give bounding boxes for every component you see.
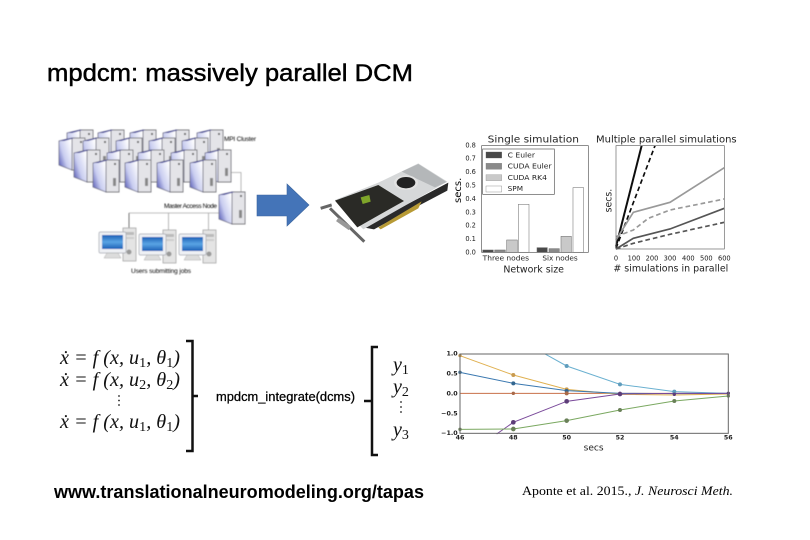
y axis label: secs. xyxy=(453,178,464,203)
outputs y1 y2 y3: y xyxy=(393,354,402,376)
outputs y1 y2 y3: y xyxy=(393,376,402,398)
x tick labels: 600 xyxy=(718,254,731,262)
x tick labels: 48 xyxy=(509,435,518,442)
y tick labels xyxy=(441,351,458,437)
equations: model inputs: 1 xyxy=(166,420,173,435)
chart title: Multiple parallel simulations xyxy=(596,135,737,146)
legend: C Euler xyxy=(508,151,535,159)
chart: time series xyxy=(441,351,733,453)
y tick labels: 0.5 xyxy=(465,181,476,189)
y tick labels: 0.2 xyxy=(465,222,476,230)
axes xyxy=(482,146,588,252)
chart title: Single simulation xyxy=(488,135,579,146)
equations: model inputs: ẋ = f (x, u xyxy=(60,411,138,433)
x tick labels: 46 xyxy=(456,435,465,442)
x tick labels xyxy=(482,254,578,263)
left bracket xyxy=(364,347,378,455)
citation: Aponte et al. 2015., J. Neurosci Meth. xyxy=(522,484,733,498)
axes xyxy=(616,146,724,249)
legend: CUDA RK4 xyxy=(508,174,548,182)
diagram captions: Master Access Node xyxy=(164,203,217,210)
x tick labels: 52 xyxy=(616,435,624,442)
y tick labels: 0.4 xyxy=(465,195,476,203)
lines xyxy=(616,146,724,249)
y tick labels: 1.0 xyxy=(446,351,458,358)
chart: multiple parallel simulations xyxy=(596,135,737,275)
x tick labels: 100 xyxy=(628,254,640,262)
chart: single simulation bars xyxy=(465,135,588,275)
right bracket xyxy=(186,341,198,451)
x tick labels: Six nodes xyxy=(542,254,578,263)
x tick labels: 500 xyxy=(700,254,713,262)
diagram captions: MPI Cluster xyxy=(224,136,257,143)
outputs y1 y2 y3 xyxy=(391,354,409,443)
cables xyxy=(129,172,241,230)
equations: model inputs: ẋ = f (x, u xyxy=(60,347,138,369)
outputs y1 y2 y3: 1 xyxy=(402,363,409,378)
x tick labels: 0 xyxy=(614,254,618,262)
series lines xyxy=(460,354,728,434)
diagram captions: Users submitting jobs xyxy=(131,268,192,275)
x axis title: secs xyxy=(584,443,604,453)
y tick labels: 0.6 xyxy=(465,168,476,176)
equations: model inputs: ẋ = f (x, u xyxy=(60,369,138,391)
equations: model inputs xyxy=(59,347,180,435)
y tick labels: 0.0 xyxy=(465,248,476,256)
y tick labels: 0.5 xyxy=(446,370,458,377)
x tick labels xyxy=(614,254,731,262)
website link: www.translationalneuromodeling.org/tapas xyxy=(53,482,424,502)
equations: model inputs: , θ xyxy=(146,347,166,369)
x tick labels: 56 xyxy=(724,435,733,442)
outputs y1 y2 y3: 3 xyxy=(402,428,409,443)
equations: model inputs: 2 xyxy=(139,378,146,393)
axes xyxy=(460,354,728,433)
equations: model inputs: 2 xyxy=(166,378,173,393)
equations: model inputs: , θ xyxy=(146,369,166,391)
x tick labels: 300 xyxy=(664,254,676,262)
x tick labels xyxy=(456,435,733,442)
equations: model inputs: , θ xyxy=(146,411,166,433)
y tick labels: −0.5 xyxy=(441,410,458,417)
x axis title: Network size xyxy=(503,264,564,275)
y tick labels: 0.8 xyxy=(465,141,476,149)
equations: model inputs: 1 xyxy=(166,356,173,371)
x tick labels: 54 xyxy=(670,435,679,442)
legend: CUDA Euler xyxy=(508,163,552,171)
y tick labels: 0.0 xyxy=(446,390,458,397)
outputs y1 y2 y3: 2 xyxy=(402,385,409,400)
equations: model inputs: 1 xyxy=(139,420,146,435)
y tick labels: 0.1 xyxy=(465,235,476,243)
user workstations xyxy=(99,228,216,263)
title: mpdcm: massively parallel DCM xyxy=(47,60,413,87)
y axis label: secs. xyxy=(603,189,614,212)
y tick labels: 0.7 xyxy=(465,155,476,163)
equations: model inputs: ) xyxy=(172,411,180,433)
equations: model inputs: ) xyxy=(172,369,180,391)
series markers xyxy=(458,354,730,431)
y tick labels: 0.3 xyxy=(465,208,476,216)
diagram: MPI cluster xyxy=(59,130,257,275)
y tick labels: −1.0 xyxy=(441,430,458,437)
server rack rows xyxy=(59,130,231,192)
y tick labels xyxy=(465,141,476,256)
equations: model inputs: ) xyxy=(172,347,180,369)
legend xyxy=(483,149,554,194)
x tick labels: 200 xyxy=(646,254,658,262)
x axis title: # simulations in parallel xyxy=(613,264,728,275)
vertical ellipsis xyxy=(400,401,402,413)
outputs y1 y2 y3: y xyxy=(393,419,402,441)
x tick labels: Three nodes xyxy=(482,254,529,263)
legend: SPM xyxy=(508,185,523,193)
x tick labels: 400 xyxy=(682,254,695,262)
bars xyxy=(483,188,584,252)
vertical ellipsis xyxy=(118,395,120,406)
arrow xyxy=(257,184,309,226)
diagram captions xyxy=(131,136,257,275)
master access node server xyxy=(219,192,245,224)
function call label: mpdcm_integrate(dcms) xyxy=(216,390,355,404)
x tick labels: 50 xyxy=(562,435,572,442)
equations: model inputs: 1 xyxy=(139,356,146,371)
icon: GPU card xyxy=(321,163,448,242)
